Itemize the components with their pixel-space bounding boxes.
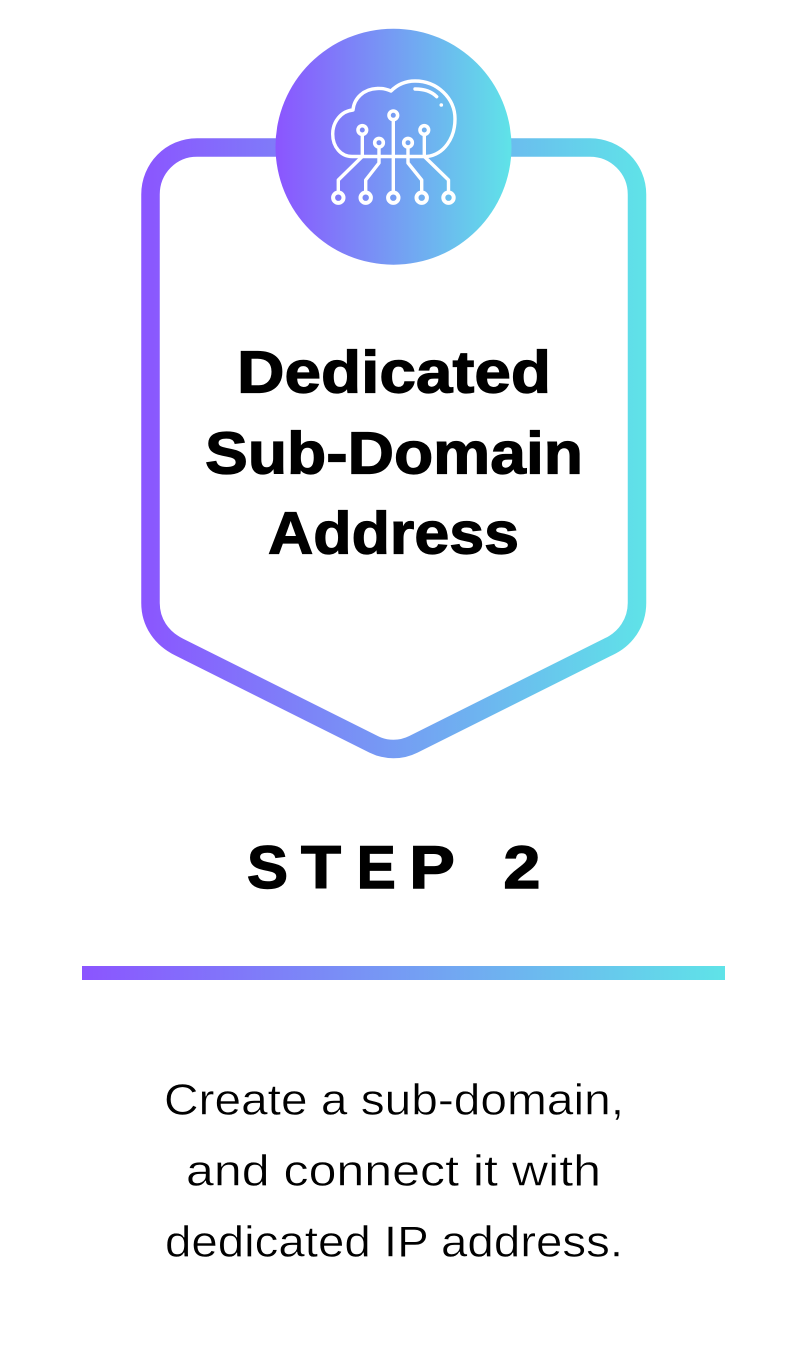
title bbox=[205, 340, 583, 566]
step label bbox=[247, 834, 540, 901]
icon circle bbox=[276, 29, 512, 265]
step label: P bbox=[409, 834, 455, 901]
title: Sub-Domain bbox=[205, 420, 583, 486]
description: Create a sub-domain, bbox=[164, 1076, 624, 1124]
icon: cloud circuit bbox=[333, 81, 455, 203]
title: Dedicated bbox=[237, 340, 551, 406]
description: and connect it with bbox=[186, 1146, 601, 1196]
step label: E bbox=[357, 834, 396, 901]
step label: 2 bbox=[503, 834, 540, 901]
description bbox=[164, 1076, 624, 1266]
step label: T bbox=[301, 834, 341, 901]
divider bar bbox=[82, 966, 725, 980]
badge frame bbox=[150, 148, 637, 749]
description: dedicated IP address. bbox=[165, 1218, 623, 1266]
title: Address bbox=[268, 500, 519, 566]
step label: S bbox=[247, 834, 288, 901]
